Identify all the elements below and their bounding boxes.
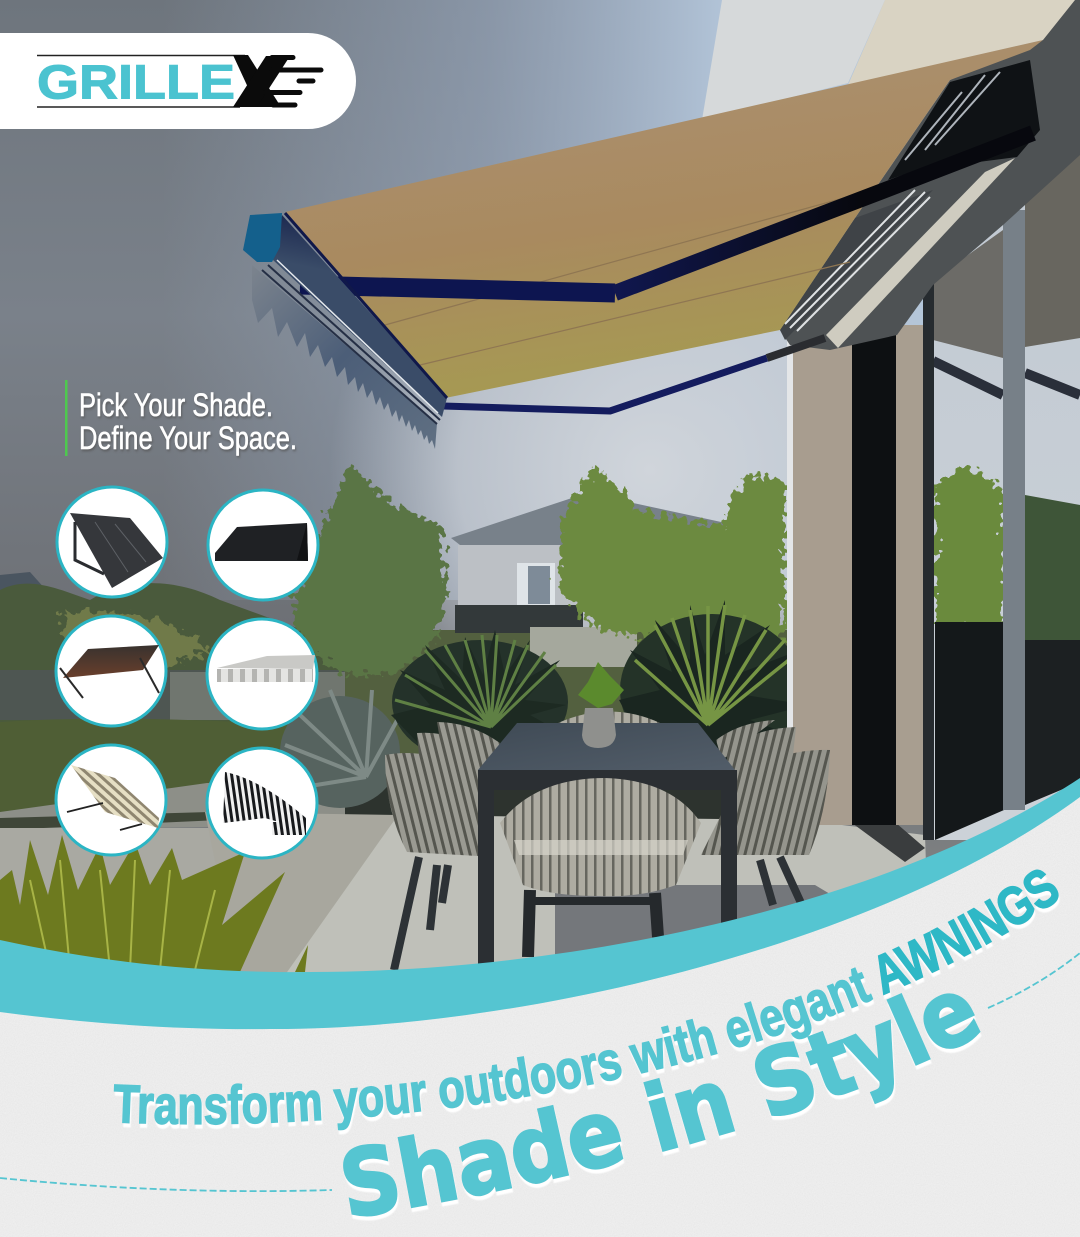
- left chairs: [385, 722, 500, 970]
- middle ground behind the table: [345, 630, 795, 830]
- right chairs: [701, 720, 830, 905]
- distant landscape with trees, wall and lawn: [0, 572, 400, 978]
- garden trees: [292, 465, 785, 675]
- product circle: black and white striped awning: [207, 748, 317, 858]
- product circle: black metal awning: [57, 487, 167, 597]
- product circle: grey striped awning: [207, 619, 317, 729]
- logo wordmark: GRILLE: [37, 56, 235, 110]
- curved headline: Transform your outdoors with elegant AWNINGS: [114, 870, 1060, 1134]
- product circle: black fabric awning: [208, 490, 318, 600]
- building upper wall: [702, 0, 1080, 120]
- paper bottom area: [479, 797, 1080, 1076]
- dashed line right: [988, 953, 1080, 1008]
- house in the distance: [451, 493, 735, 667]
- dashed line left: [0, 1178, 332, 1191]
- awning housing and soffit: [780, 0, 1080, 350]
- awning canopy: [285, 40, 1043, 398]
- patio floor: [205, 812, 930, 985]
- glass doors with reflections: [923, 150, 1080, 840]
- back chair: [558, 712, 660, 723]
- logo wordmark: [37, 55, 321, 110]
- tagline: Pick Your Shade.: [79, 387, 273, 423]
- agave plants: [280, 600, 808, 808]
- tagline: [79, 387, 297, 456]
- awning support arms: [300, 133, 1033, 411]
- tagline: Define Your Space.: [79, 420, 297, 456]
- teal curved band: [0, 778, 1080, 1029]
- sky background: [0, 0, 1080, 900]
- tagline accent bar: [65, 380, 68, 456]
- front chair: [500, 778, 701, 957]
- right column and wall: [787, 325, 924, 830]
- awning front bar and valance: [243, 213, 447, 449]
- product circle: brown awning: [56, 616, 166, 726]
- logo pill: [0, 33, 356, 129]
- foreground grass: [0, 835, 308, 972]
- patio table and vase: [478, 662, 737, 965]
- product circle: tan striped awning: [56, 745, 166, 855]
- curved title: Shade in Style: [343, 993, 982, 1220]
